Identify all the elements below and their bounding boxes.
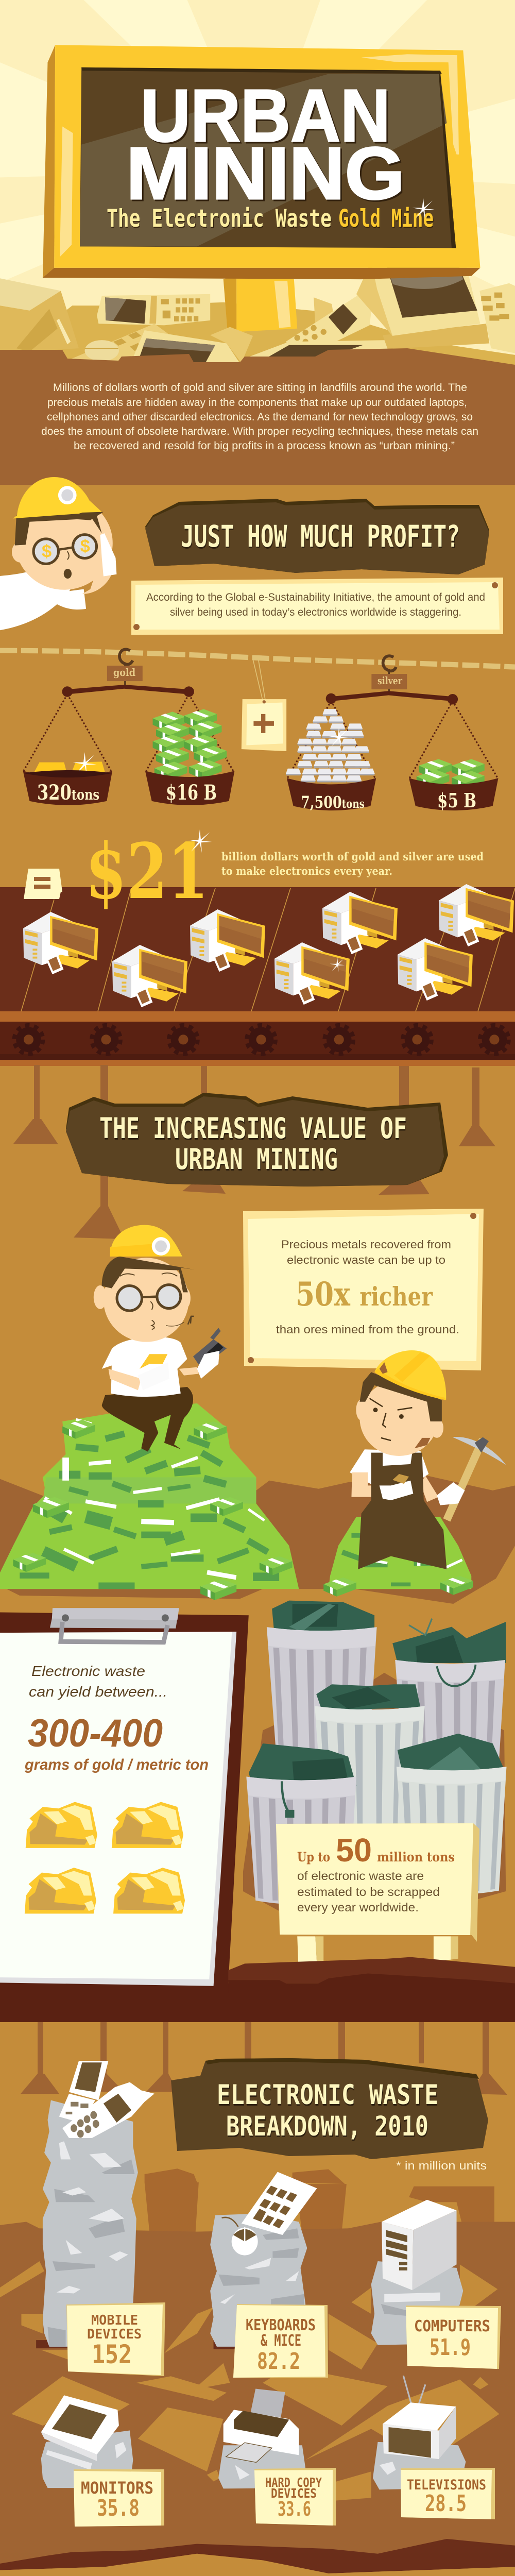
gears — [14, 1025, 509, 1054]
sign: televisions: 28.5 — [425, 2490, 467, 2517]
sign: hard copy devices: HARD COPY — [265, 2475, 322, 2490]
icon: sparkle — [412, 198, 435, 220]
intro text — [41, 382, 478, 452]
heading plaque: THE INCREASING VALUE OF — [99, 1112, 407, 1145]
clipboard text — [24, 1663, 209, 1773]
illustration: flip phone — [97, 294, 210, 325]
icon: flip phone — [59, 2061, 108, 2123]
panel: intro band — [0, 348, 515, 487]
computers — [23, 884, 514, 1007]
sign: computers — [406, 2306, 501, 2369]
icon: candybar phone — [62, 2082, 154, 2138]
illustration: laptop — [250, 340, 388, 358]
miner with phone — [94, 1225, 227, 1452]
text: 21 billion: billion dollars worth of gold and silver are used — [221, 850, 484, 863]
heading plaque — [145, 499, 489, 574]
sign legs and base — [228, 1936, 515, 1993]
sign: 50 million tons: million tons — [377, 1850, 455, 1865]
hanging lamps — [21, 2022, 507, 2095]
illustration: discarded monitor — [131, 327, 253, 363]
sign: mobile devices: MOBILE — [91, 2313, 138, 2328]
pile: televisions — [373, 2442, 466, 2489]
heading plaque: BREAKDOWN, 2010 — [226, 2111, 428, 2142]
sign: monitors — [74, 2469, 164, 2527]
sign: 50 million tons: 50 — [336, 1832, 372, 1869]
icon: sparkle — [188, 829, 212, 853]
title: MINING — [126, 132, 405, 215]
stat: 7500 tons: 7,500tons — [301, 792, 365, 812]
icon: keyboard and mouse — [222, 2172, 317, 2256]
sign: hard copy devices: DEVICES — [271, 2486, 317, 2501]
illustration: CRT monitor — [356, 252, 489, 349]
label: silver: silver — [377, 674, 402, 687]
sign: monitors: MONITORS — [81, 2478, 153, 2498]
note: 50x richer: Precious metals recovered from — [281, 1238, 451, 1251]
icon: television — [383, 2376, 456, 2459]
silver scale — [286, 656, 499, 810]
intro text: Millions of dollars worth of gold and silver are sitting in landfills around the world. The — [53, 382, 467, 394]
equals tag — [24, 869, 62, 899]
money pile small — [323, 1517, 473, 1597]
note: in million units: * in million units — [396, 2159, 487, 2172]
illustration: monitor sign stand — [224, 275, 297, 332]
sign: keyboards and mice: 82.2 — [257, 2348, 300, 2375]
plus tag — [242, 656, 286, 751]
intro text: precious metals are hidden away in the components that make up our outdated laptops, — [47, 397, 467, 409]
gold nuggets — [25, 1802, 185, 1913]
stat: 320 tons: 320tons — [37, 781, 99, 805]
intro text: cellphones and other discarded electronics. As the demand for new technology grows, so — [47, 411, 473, 423]
sign: mobile devices: 152 — [92, 2340, 132, 2369]
subtitle: The Electronic Waste — [107, 205, 332, 233]
note: 50x richer — [243, 1209, 484, 1370]
sign: 50 million tons — [276, 1823, 479, 1942]
note: intro to profit — [131, 578, 503, 635]
illustration: billboard monitor frame — [43, 45, 480, 279]
sign: keyboards and mice — [233, 2304, 328, 2378]
miner with pickaxe — [350, 1350, 506, 1569]
text: 21 billion: to make electronics every year. — [221, 865, 392, 877]
miner with dollar glasses: $ — [42, 542, 52, 562]
sign: hard copy devices: 33.6 — [278, 2498, 311, 2520]
panel: just how much profit — [0, 477, 515, 889]
intro text: does the amount of obsolete hardware. With proper recycling techniques, these metals can — [41, 426, 478, 437]
ground with patches — [0, 2168, 515, 2576]
money pile large — [0, 1403, 299, 1600]
intro text: be recovered and resold for big profits in a process known as “urban mining.” — [74, 440, 455, 452]
icon: monitor — [41, 2395, 119, 2461]
pile: monitors — [41, 2431, 133, 2488]
illustration: keyboard and mouse — [69, 324, 179, 365]
ground hills — [0, 1476, 515, 1604]
sign: mobile devices — [66, 2302, 165, 2376]
sign: keyboards and mice: & MICE — [261, 2332, 301, 2350]
big number 21: $21 — [85, 826, 209, 916]
label: gold: gold — [113, 666, 135, 679]
sign: mobile devices: DEVICES — [87, 2327, 142, 2342]
heading plaque: URBAN MINING — [175, 1143, 338, 1176]
illustration: old computer tower — [0, 278, 79, 353]
illustration: keyboard right — [479, 283, 515, 353]
hanging lamps — [13, 1065, 495, 1239]
miner with dollar glasses: $ — [80, 536, 90, 556]
pile: computers — [371, 2261, 463, 2345]
heading plaque — [66, 1093, 448, 1187]
note: intro to profit: According to the Global e-Sustainability Initiative, the amount of gold and — [146, 591, 485, 603]
sign: 50 million tons: estimated to be scrapped — [297, 1885, 440, 1899]
title — [126, 74, 405, 215]
heading plaque — [171, 2058, 488, 2159]
sign: keyboards and mice: KEYBOARDS — [246, 2316, 316, 2334]
sign: 50 million tons: Up to — [297, 1850, 330, 1865]
panel: hero — [0, 0, 515, 371]
text: 21 billion — [221, 850, 484, 877]
note: intro to profit: silver being used in today’s electronics worldwide is staggering. — [170, 606, 461, 618]
clipboard text: can yield between... — [29, 1684, 167, 1700]
heading plaque: ELECTRONIC WASTE — [217, 2079, 438, 2111]
panel: increasing value — [0, 1065, 515, 2024]
miner with dollar glasses — [0, 477, 116, 630]
stat: 16 billion: $16 B — [166, 781, 217, 805]
note: 50x richer: 50x richer — [296, 1275, 433, 1314]
illustration: candybar phone — [286, 294, 383, 348]
gold scale — [23, 649, 234, 805]
scales and amounts — [0, 649, 515, 810]
pile: keyboards and mice — [210, 2214, 307, 2349]
sign: 50 million tons: every year worldwide. — [297, 1901, 419, 1914]
note: 50x richer: electronic waste can be up to — [287, 1253, 445, 1266]
icon: computer tower — [382, 2200, 457, 2290]
sign: computers: COMPUTERS — [414, 2317, 490, 2335]
panel: computer floor — [0, 826, 515, 1066]
subtitle: Gold Mine — [338, 205, 434, 233]
clipboard text: 300-400 — [28, 1711, 163, 1755]
sign: hard copy devices — [254, 2468, 336, 2526]
sign: 50 million tons: of electronic waste are — [297, 1869, 424, 1883]
pile: mobile devices — [36, 2100, 138, 2348]
clipboard text: Electronic waste — [31, 1663, 145, 1679]
sign: computers: 51.9 — [430, 2334, 471, 2361]
note: 50x richer: than ores mined from the ground. — [276, 1323, 459, 1336]
title: URBAN — [141, 74, 390, 157]
icon: printer — [224, 2389, 299, 2462]
trash cans with electronics — [243, 1601, 506, 1911]
panel: e-waste breakdown — [0, 2022, 515, 2576]
pile: hard copy devices — [218, 2445, 305, 2488]
sign: televisions: TELEVISIONS — [407, 2477, 486, 2493]
stat: 5 billion: $5 B — [437, 789, 476, 812]
clipboard text: grams of gold / metric ton — [24, 1756, 209, 1773]
sign: monitors: 35.8 — [97, 2495, 140, 2521]
clipboard — [0, 1608, 515, 2023]
sign: televisions — [401, 2468, 495, 2519]
